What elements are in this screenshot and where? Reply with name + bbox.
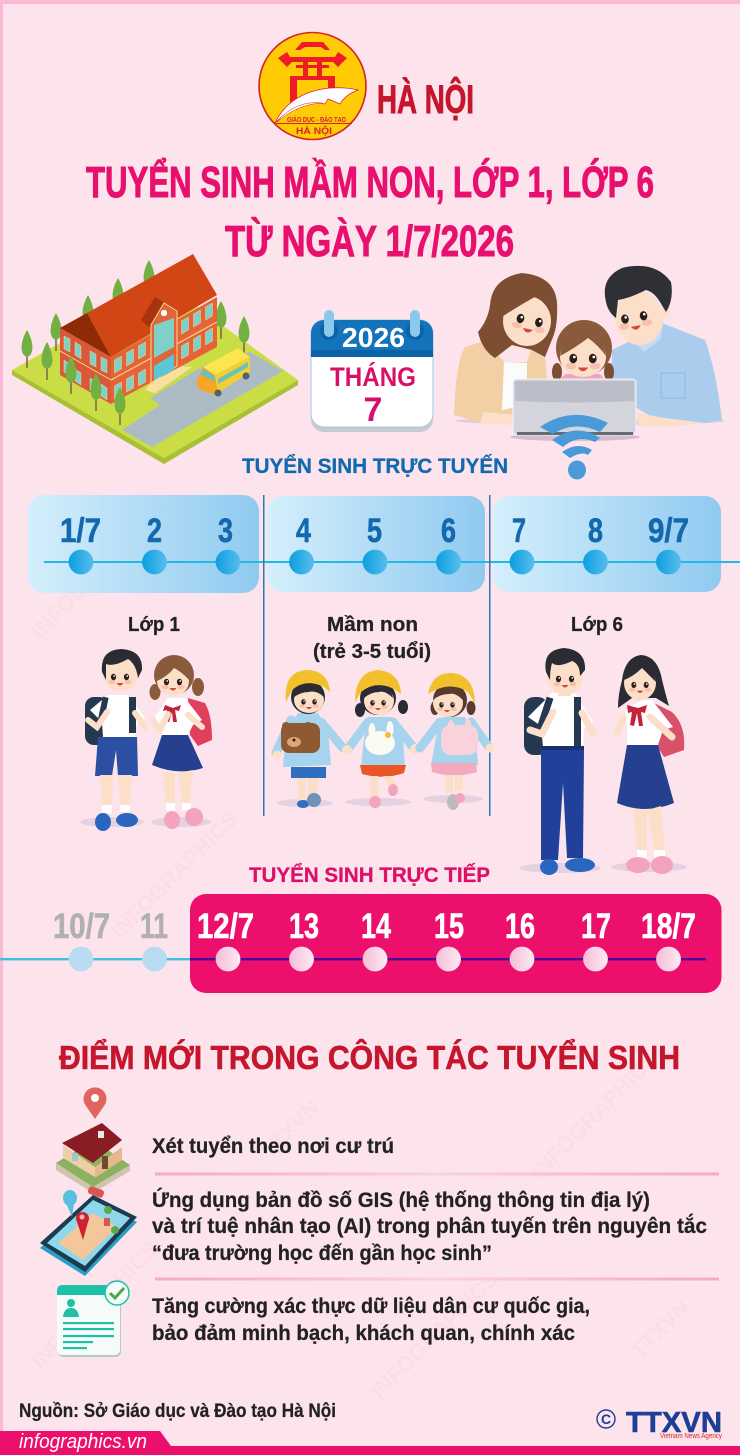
panel: in-person timeline: 15: [434, 907, 464, 946]
panel: in-person timeline: 18/7: [641, 907, 696, 946]
panel: in-person timeline: 10/7: [53, 907, 110, 946]
title: [86, 156, 654, 266]
label: preschool: [313, 614, 431, 663]
panel: online timeline: 6: [441, 512, 456, 550]
text: population data: bảo đảm minh bạch, khách quan, chính xác: [152, 1322, 575, 1345]
watermarks: INFOGRAPHICS: [366, 1267, 503, 1404]
title: TỪ NGÀY 1/7/2026: [225, 216, 514, 266]
panel: online timeline: 2: [147, 512, 162, 550]
illustration: grade 6 pupils: [519, 648, 687, 875]
panel: in-person timeline: 16: [505, 907, 535, 946]
logo: Hanoi education department: HÀ NỘI: [296, 125, 332, 137]
icon: phone with map: [40, 1186, 137, 1276]
icon: calendar 2026 month 7: 2026: [342, 322, 405, 353]
panel: in-person timeline: [0, 894, 722, 993]
heading: in-person enrolment: TUYỂN SINH TRỰC TIẾP: [249, 864, 490, 887]
illustration: preschool children: [272, 670, 494, 810]
logo: TTXVN: TTXVN: [626, 1407, 722, 1439]
panel: in-person timeline: 12/7: [197, 907, 254, 946]
text: population data: Tăng cường xác thực dữ liệu dân cư quốc gia,: [152, 1295, 590, 1318]
heading: online enrolment: TUYỂN SINH TRỰC TUYẾN: [242, 453, 508, 478]
text: GIS and AI: “đưa trường học đến gần học sinh”: [152, 1242, 492, 1265]
panel: online timeline: 3: [218, 512, 233, 550]
text: population data: [152, 1295, 590, 1345]
logo: Hanoi education department: GIÁO DỤC - ĐÀO TẠO: [287, 115, 346, 124]
panel: online timeline: 5: [367, 512, 382, 550]
icon: house: [56, 1123, 130, 1193]
watermarks: [26, 507, 695, 1404]
watermarks: INFOGRAPHICS: [526, 1047, 663, 1184]
divider 2: [155, 1278, 719, 1280]
watermarks: INFOGRAPHICS: [26, 1237, 163, 1374]
label: grade 1: Lớp 1: [128, 614, 180, 636]
panel: online timeline: 4: [296, 512, 311, 550]
illustration: family at laptop: [454, 266, 725, 441]
panel: in-person timeline: 13: [289, 907, 319, 946]
icon: calendar 2026 month 7: THÁNG: [330, 361, 416, 392]
label: preschool: Mầm non: [327, 614, 418, 636]
heading: Hà Nội: HÀ NỘI: [377, 76, 474, 122]
icon: ID card with check: [57, 1281, 129, 1357]
logo: Hanoi education department: [259, 32, 366, 140]
panel: in-person timeline: 11: [140, 907, 168, 946]
illustration: grade 1 pupils: [80, 649, 212, 831]
logo: TTXVN: C: [601, 1411, 611, 1427]
panel: online timeline: 8: [588, 512, 603, 550]
panel: online timeline: [28, 495, 740, 593]
text: GIS and AI: Ứng dụng bản đồ số GIS (hệ thống thông tin địa lý): [152, 1188, 650, 1212]
text: GIS and AI: [152, 1188, 707, 1265]
icon: map pin: [84, 1087, 106, 1119]
heading: what's new: ĐIỂM MỚI TRONG CÔNG TÁC TUYỂN SINH: [59, 1038, 680, 1076]
panel: online timeline: 9/7: [648, 512, 689, 550]
source: Nguồn: Sở Giáo dục và Đào tạo Hà Nội: [19, 1401, 336, 1422]
footer bar: [0, 1431, 740, 1455]
column dividers: [263, 495, 490, 816]
divider 1: [155, 1172, 719, 1176]
watermarks: TTXVN: [626, 1295, 695, 1364]
panel: in-person timeline: 17: [581, 907, 611, 946]
watermarks: INFOGRAPHICS: [26, 507, 163, 644]
icon: calendar 2026 month 7: [311, 310, 433, 432]
panel: online timeline: 1/7: [60, 512, 101, 550]
panel: in-person timeline: 14: [361, 907, 391, 946]
text: residence: Xét tuyển theo nơi cư trú: [152, 1135, 394, 1158]
label: grade 6: Lớp 6: [571, 614, 623, 636]
panel: online timeline: 7: [512, 512, 526, 550]
footer bar: infographics.vn: [19, 1431, 147, 1453]
watermarks: TTXVN: [256, 1095, 325, 1164]
label: preschool: (trẻ 3-5 tuổi): [313, 641, 431, 663]
watermarks: INFOGRAPHICS: [106, 807, 243, 944]
illustration: school: [12, 254, 298, 464]
text: GIS and AI: và trí tuệ nhân tạo (AI) trong phân tuyến trên nguyên tắc: [152, 1214, 707, 1238]
icon: wifi signal: [540, 415, 608, 480]
logo: TTXVN: Vietnam News Agency: [660, 1433, 722, 1440]
icon: calendar 2026 month 7: 7: [364, 391, 382, 429]
